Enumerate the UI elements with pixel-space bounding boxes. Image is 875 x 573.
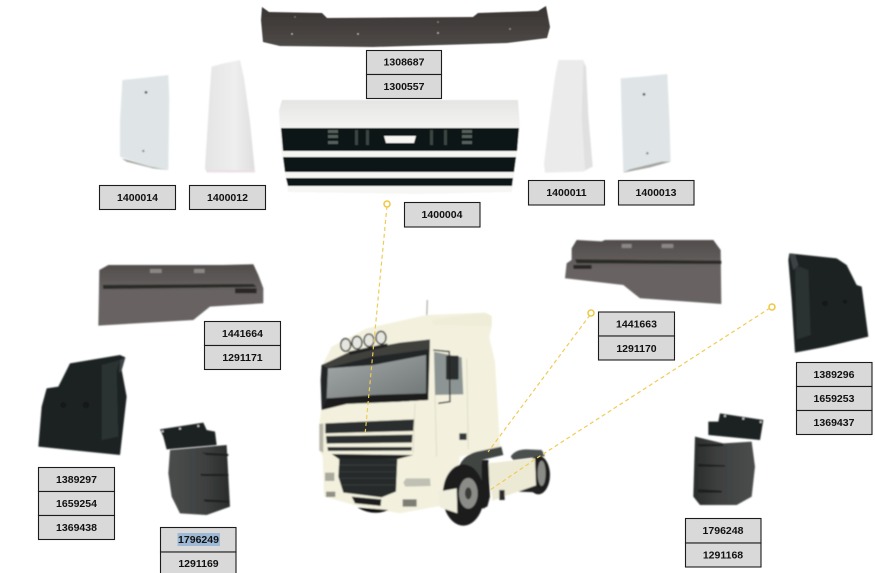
front lower grille (332, 454, 413, 459)
door lines (413, 358, 468, 457)
label: right mudguard part numbers: 1659253 (814, 393, 855, 405)
label: visor part numbers: 1308687 (384, 56, 425, 68)
label: grille part number: 1400004 (422, 209, 463, 221)
label: skirt left part numbers (204, 322, 280, 370)
highlighted selection on 1796249 (178, 533, 220, 546)
part: right corner panel (621, 74, 671, 173)
side window and mirror (434, 352, 463, 395)
part: left side skirt (98, 264, 263, 326)
part: left rear wing bracket (160, 423, 230, 515)
label: rear wing right part numbers: 1796248 (703, 525, 744, 537)
part: sun visor (261, 6, 550, 47)
label: rear wing right part numbers (686, 518, 761, 567)
label: left mudguard part numbers: 1389297 (56, 474, 97, 486)
part: right wind deflector (544, 60, 593, 173)
label: rear wing left part numbers (160, 528, 236, 573)
label: skirt left part numbers: 1291171 (222, 352, 263, 364)
label: left mudguard part numbers: 1369438 (56, 522, 97, 534)
label: skirt right part numbers: 1441663 (616, 318, 657, 330)
label: right mudguard part numbers: 1369437 (814, 417, 855, 429)
connector: right skirt to truck (488, 310, 594, 452)
label: skirt left part numbers: 1441664 (222, 328, 263, 340)
rear wheel and chassis (511, 449, 550, 494)
label: right mudguard part numbers: 1389296 (814, 369, 855, 381)
label: rear wing right part numbers: 1291168 (703, 550, 743, 562)
roof spot lights (341, 331, 386, 351)
part: left wind deflector (205, 60, 255, 172)
label: rear wing left part numbers: 1796249 (178, 534, 219, 546)
label: 1400011: 1400011 (546, 187, 587, 199)
part: left mudguard (38, 355, 127, 455)
roof shading (432, 313, 492, 326)
label: 1400012: 1400012 (207, 192, 248, 204)
label: 1400014: 1400014 (117, 192, 158, 204)
part: right mudguard (788, 253, 868, 353)
label: skirt right part numbers (598, 312, 674, 360)
label: right mudguard part numbers (796, 362, 872, 434)
connector: grille to truck (365, 201, 390, 435)
label: rear wing left part numbers: 1291169 (178, 558, 219, 570)
label: grille part number (404, 202, 480, 227)
windscreen (321, 339, 430, 410)
cab body (319, 313, 502, 513)
label: 1400013: 1400013 (636, 187, 677, 199)
label: left mudguard part numbers (38, 468, 114, 540)
label: left mudguard part numbers: 1659254 (56, 498, 97, 510)
label: skirt right part numbers: 1291170 (616, 343, 657, 355)
label: 1400014 (100, 186, 176, 210)
part: front grille panel (279, 100, 520, 194)
part: right rear wing bracket (693, 413, 763, 505)
antenna (425, 300, 429, 320)
label: visor part numbers: 1300557 (384, 81, 425, 93)
label: visor part numbers (366, 50, 442, 98)
cab grille bars (325, 419, 414, 433)
truck illustration (319, 300, 550, 526)
front wheel arch and wheel (455, 447, 503, 508)
part: right side skirt (565, 240, 721, 304)
label: 1400011 (528, 180, 604, 205)
label: 1400012 (190, 186, 266, 210)
part: left corner panel (120, 75, 169, 170)
connector: right mudguard to truck (490, 304, 775, 490)
label: 1400013 (618, 180, 694, 205)
headlights and bumper details (403, 478, 431, 487)
side skirt chassis (487, 458, 536, 501)
